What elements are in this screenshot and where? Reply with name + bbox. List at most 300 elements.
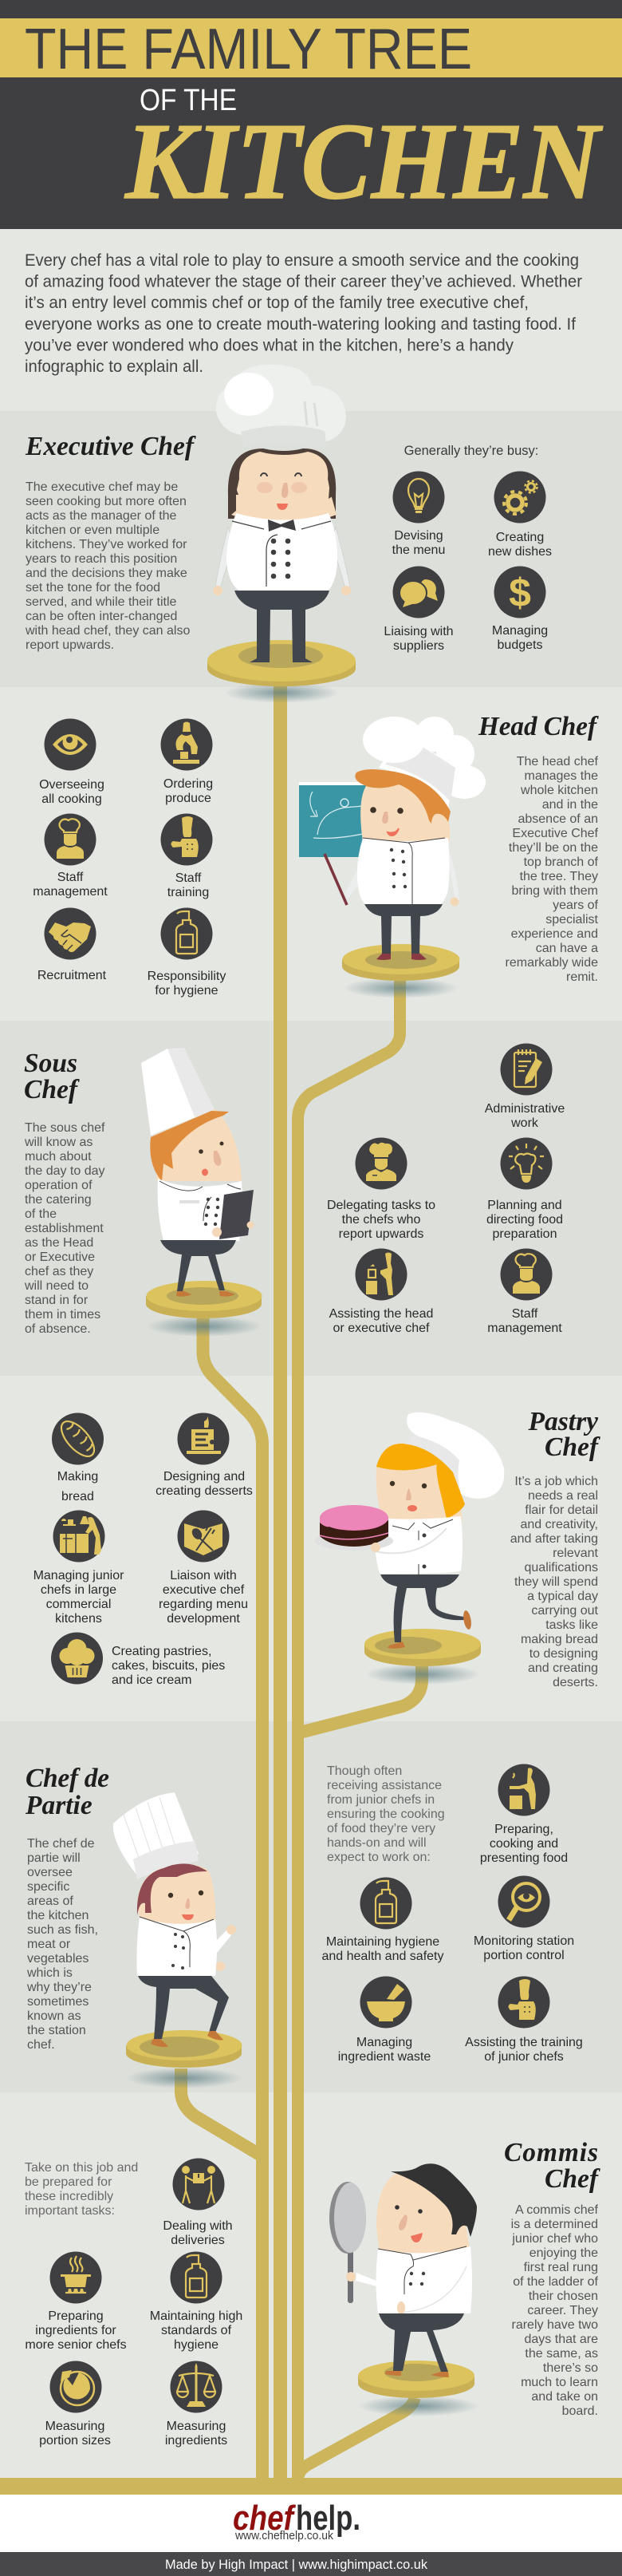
section: commis chef xyxy=(25,2138,600,2448)
pointer xyxy=(325,854,347,905)
body text: of the xyxy=(25,1207,57,1221)
intro text: ensuring the cooking xyxy=(327,1808,445,1821)
character: head chef xyxy=(299,717,486,960)
body text: such as fish, xyxy=(27,1923,98,1937)
body text: remit. xyxy=(566,970,598,984)
icon: preparing ingredients xyxy=(49,2252,102,2303)
panel: executive chef background xyxy=(0,411,622,687)
label: produce xyxy=(165,792,211,805)
label: management xyxy=(33,885,108,899)
label: development xyxy=(167,1612,240,1626)
label: bread xyxy=(61,1490,94,1503)
icon: recruitment xyxy=(45,908,96,959)
label: Designing and xyxy=(163,1470,245,1484)
label: Monitoring station xyxy=(474,1934,574,1948)
title: kitchen: KITCHEN xyxy=(124,101,604,222)
intro text: it’s an entry level commis chef or top of the family tree executive chef, xyxy=(25,294,529,312)
face and hair xyxy=(355,769,451,842)
shoes xyxy=(388,1610,473,1649)
body text: kitchen or even multiple xyxy=(26,523,159,537)
label: regarding menu xyxy=(159,1598,248,1611)
label: deliveries xyxy=(171,2234,225,2247)
branch: chef de partie xyxy=(181,2068,262,2156)
label: Overseeing xyxy=(39,778,104,792)
platform shadows xyxy=(127,682,480,2416)
hand xyxy=(450,897,459,907)
label: or executive chef xyxy=(333,1322,430,1335)
label: Assisting the training xyxy=(465,2036,583,2049)
body text: served, and while their title xyxy=(26,595,177,609)
footer: credit bar xyxy=(0,2552,622,2576)
intro text: be prepared for xyxy=(25,2175,112,2189)
trousers xyxy=(379,2313,464,2372)
label: Administrative xyxy=(485,1102,565,1116)
intro text: of amazing food whatever the stage of their career they’ve achieved. Whether xyxy=(25,273,582,291)
heading: Executive Chef xyxy=(25,432,196,461)
body text: enjoying the xyxy=(529,2246,598,2260)
body text: as the Head xyxy=(25,1236,93,1250)
body text: first real rung xyxy=(524,2261,598,2274)
label: ingredient waste xyxy=(338,2050,431,2064)
body text: partie will xyxy=(27,1851,81,1865)
arm xyxy=(356,2273,376,2286)
icon: managing junior chefs in large commercial kitchens xyxy=(53,1510,105,1563)
label: report upwards xyxy=(339,1227,423,1241)
label: portion control xyxy=(483,1949,565,1962)
label: the chefs who xyxy=(342,1213,420,1227)
label: Managing xyxy=(356,2036,412,2049)
label: Measuring xyxy=(45,2420,104,2433)
heading: Head Chef xyxy=(478,712,599,741)
panel: intro background xyxy=(0,229,622,411)
body text: why they’re xyxy=(26,1981,92,1994)
icon: monitoring station portion control xyxy=(498,1875,550,1928)
body text: much to learn xyxy=(521,2376,598,2389)
body text: Executive Chef xyxy=(512,827,599,840)
body text: junior chef who xyxy=(511,2232,598,2246)
body text: stand in for xyxy=(25,1294,89,1307)
body text: years to reach this position xyxy=(26,552,177,566)
body text: the kitchen xyxy=(27,1909,89,1922)
body text: a typical day xyxy=(527,1590,598,1603)
intro text: expect to work on: xyxy=(327,1851,431,1864)
body text: they’ll be on the xyxy=(509,841,598,855)
heading: Chef de xyxy=(26,1764,109,1793)
body text: of the ladder of xyxy=(513,2275,599,2289)
header panel xyxy=(0,0,622,229)
body text: needs a real xyxy=(528,1489,598,1503)
label: Liaison with xyxy=(170,1569,237,1582)
label: Delegating tasks to xyxy=(327,1199,435,1212)
character: pastry chef xyxy=(315,1412,504,1649)
hands xyxy=(215,1925,236,1971)
icon: liaison with executive chef regarding menu development xyxy=(177,1510,230,1563)
body text: It’s a job which xyxy=(514,1475,598,1488)
section: sous chef xyxy=(24,1044,565,1336)
icon: responsibility for hygiene xyxy=(161,908,212,959)
body text: and after taking xyxy=(510,1532,598,1546)
shoes xyxy=(385,2371,449,2377)
hat xyxy=(113,1792,199,1879)
title: of the: OF THE xyxy=(140,84,237,117)
jacket xyxy=(376,2246,472,2314)
jacket xyxy=(375,1516,463,1576)
credit text: Made by High Impact | www.highimpact.co.uk xyxy=(165,2557,427,2572)
label: work xyxy=(510,1116,539,1130)
right arm xyxy=(214,1930,231,1957)
label: Making xyxy=(57,1470,98,1484)
body text: days that are xyxy=(525,2333,598,2346)
body text: areas of xyxy=(27,1894,73,1908)
body text: kitchens. They’ve worked for xyxy=(26,538,187,551)
label: suppliers xyxy=(393,639,444,653)
hat xyxy=(363,717,486,810)
hat xyxy=(141,1048,215,1136)
body text: the station xyxy=(27,2024,86,2037)
platform xyxy=(358,2361,474,2398)
body text: meat or xyxy=(27,1938,71,1951)
label: portion sizes xyxy=(39,2434,111,2448)
intro text: these incredibly xyxy=(25,2190,113,2203)
branch: pastry chef xyxy=(300,1666,422,1732)
label: presenting food xyxy=(480,1851,568,1865)
body text: and creating xyxy=(528,1661,598,1675)
icon: staff management xyxy=(45,814,96,865)
heading: Commis xyxy=(504,2138,598,2167)
intro text: important tasks: xyxy=(25,2204,115,2218)
logo: url: www.chefhelp.co.uk xyxy=(234,2529,333,2542)
label: Recruitment xyxy=(37,969,107,982)
label: Managing junior xyxy=(33,1569,124,1582)
intro text: you’ve ever wondered who does what in the kitchen, here’s a handy xyxy=(25,337,514,354)
tablet xyxy=(219,1190,254,1239)
label: cooking and xyxy=(490,1837,558,1851)
body text: The chef de xyxy=(27,1837,95,1851)
body text: The executive chef may be xyxy=(26,480,178,494)
icon: preparing, cooking and presenting food xyxy=(498,1764,550,1816)
label: Devising xyxy=(394,529,443,543)
panel: head chef background xyxy=(0,687,622,1021)
section: chef de partie xyxy=(25,1764,583,2068)
body text: can have a xyxy=(536,942,598,955)
body text: remarkably wide xyxy=(506,956,598,970)
label: Measuring xyxy=(167,2420,226,2433)
section: pastry chef xyxy=(33,1407,600,1689)
body text: manages the xyxy=(524,769,598,783)
panel: chef de partie background xyxy=(0,1721,622,2092)
footer: logo panel xyxy=(0,2495,622,2552)
label: the menu xyxy=(392,543,445,557)
intro text: everyone works as one to create mouth-watering looking and tasting food. If xyxy=(25,315,576,334)
icon: dealing with deliveries xyxy=(172,2158,225,2211)
jacket xyxy=(357,838,450,904)
body text: making bread xyxy=(521,1633,598,1646)
body text: the tree. They xyxy=(520,870,598,883)
trousers xyxy=(380,1574,464,1642)
frying pan xyxy=(329,2182,366,2303)
label: commercial xyxy=(46,1598,111,1611)
label: Dealing with xyxy=(163,2219,233,2233)
body text: vegetables xyxy=(27,1952,89,1966)
body text: deserts. xyxy=(553,1676,598,1689)
icon: creating new dishes xyxy=(494,471,545,523)
branch: sous chef xyxy=(203,1318,262,2478)
section: executive chef xyxy=(25,365,552,686)
heading: Pastry xyxy=(528,1407,598,1436)
panel: pastry chef background xyxy=(0,1376,622,1721)
icon: creating pastries xyxy=(51,1633,103,1684)
face and hair xyxy=(150,1109,242,1181)
body text: carrying out xyxy=(531,1604,599,1618)
body text: qualifications xyxy=(525,1561,598,1574)
label: for hygiene xyxy=(155,984,218,998)
label: Preparing, xyxy=(494,1823,553,1836)
icon: ordering produce xyxy=(161,718,212,771)
body text: chef. xyxy=(27,2038,55,2052)
hat xyxy=(216,365,346,449)
icon: making bread xyxy=(52,1412,104,1465)
body text: the day to day xyxy=(25,1164,105,1178)
character: executive chef xyxy=(213,365,351,662)
icon: managing budgets xyxy=(494,567,545,618)
title: the family tree: THE FAMILY TREE xyxy=(25,18,472,81)
label: training xyxy=(167,886,209,899)
branch: commis chef xyxy=(298,2398,415,2478)
label: Preparing xyxy=(48,2309,104,2323)
shoes xyxy=(376,954,427,960)
subheading: Generally they’re busy: xyxy=(404,444,538,458)
body text: set the tone for the food xyxy=(26,581,160,595)
icon: managing ingredient waste xyxy=(360,1976,411,2029)
body text: experience and xyxy=(511,927,598,941)
label: Responsibility xyxy=(148,970,226,983)
intro text: Take on this job and xyxy=(25,2161,138,2175)
label: and health and safety xyxy=(321,1950,444,1963)
base band xyxy=(0,2478,622,2495)
intro text: receiving assistance xyxy=(327,1779,442,1792)
label: Maintaining hygiene xyxy=(326,1935,439,1949)
body text: bring with them xyxy=(512,884,598,898)
shoes xyxy=(176,1291,235,1297)
icon: liaising with suppliers xyxy=(392,567,445,618)
label: creating desserts xyxy=(156,1484,253,1498)
platform xyxy=(146,1281,262,1318)
label: and ice cream xyxy=(112,1673,191,1687)
body text: much about xyxy=(25,1150,92,1164)
body text: and the decisions they make xyxy=(26,567,187,580)
chalkboard xyxy=(299,782,367,857)
intro text: Every chef has a vital role to play to ensure a smooth service and the cooking xyxy=(25,251,579,270)
icon: managing budgets: $ xyxy=(509,571,531,615)
body text: and take on xyxy=(531,2390,598,2404)
label: new dishes xyxy=(488,545,552,559)
body text: which is xyxy=(26,1966,73,1980)
body text: with head chef, they can also xyxy=(25,624,190,638)
face and hair xyxy=(376,2163,477,2254)
intro text: hands-on and will xyxy=(327,1836,427,1850)
body text: their chosen xyxy=(529,2290,598,2303)
icon: maintaining high standards of hygiene xyxy=(171,2252,222,2303)
body text: can be often inter-changed xyxy=(26,610,177,623)
body text: there’s so xyxy=(543,2361,598,2375)
heading: Chef xyxy=(24,1075,80,1104)
icon: measuring ingredients xyxy=(171,2361,222,2413)
label: Maintaining high xyxy=(150,2309,242,2323)
icon: assisting the training of junior chefs xyxy=(498,1976,550,2029)
platform xyxy=(342,944,459,981)
label: budgets xyxy=(498,638,542,652)
body text: and in the xyxy=(542,798,598,812)
body text: whole kitchen xyxy=(520,784,598,797)
body text: absence of an xyxy=(518,812,598,826)
face and hair xyxy=(228,448,337,525)
body text: they will spend xyxy=(514,1575,598,1589)
body text: specialist xyxy=(545,913,599,926)
icon: delegating tasks xyxy=(356,1138,407,1189)
body text: to designing xyxy=(529,1647,598,1661)
icon: overseeing all cooking xyxy=(45,718,96,771)
hands xyxy=(212,1221,254,1237)
body text: operation of xyxy=(25,1179,93,1192)
body text: the same, as xyxy=(525,2347,598,2361)
body text: specific xyxy=(27,1880,69,1894)
trousers xyxy=(138,1976,229,2039)
body text: career. They xyxy=(527,2304,598,2317)
label: management xyxy=(487,1322,562,1335)
body text: oversee xyxy=(27,1866,73,1879)
trousers xyxy=(234,591,329,662)
icon: administrative work xyxy=(501,1044,552,1095)
character: sous chef xyxy=(141,1048,254,1297)
label: Creating xyxy=(496,531,544,544)
cake xyxy=(315,1505,393,1551)
label: preparation xyxy=(493,1227,557,1241)
body text: or Executive xyxy=(25,1250,95,1264)
label: Staff xyxy=(175,871,202,885)
heading: Sous xyxy=(24,1049,77,1078)
label: Managing xyxy=(492,624,548,638)
body text: will need to xyxy=(24,1279,89,1293)
label: ingredients for xyxy=(35,2324,116,2337)
body text: chef as they xyxy=(25,1265,93,1278)
hat xyxy=(405,1412,504,1499)
label: directing food xyxy=(486,1213,563,1227)
logo: chef: chef xyxy=(233,2499,297,2538)
body text: them in times xyxy=(25,1308,100,1322)
hand xyxy=(346,2272,356,2282)
intro text: infographic to explain all. xyxy=(25,358,203,376)
branch: head chef xyxy=(298,981,400,2478)
label: all cooking xyxy=(41,792,102,806)
shoes xyxy=(151,2031,223,2047)
intro text: of food they’re very xyxy=(327,1822,435,1835)
label: ingredients xyxy=(165,2434,227,2448)
body text: of absence. xyxy=(25,1322,91,1336)
character: chef de partie xyxy=(113,1792,236,2047)
body text: seen cooking but more often xyxy=(26,495,187,508)
body text: report upwards. xyxy=(26,638,114,652)
label: cakes, biscuits, pies xyxy=(112,1659,225,1673)
hand xyxy=(371,1543,380,1552)
label: chefs in large xyxy=(41,1583,116,1597)
body text: The sous chef xyxy=(25,1121,105,1135)
icon: devising the menu xyxy=(392,471,445,523)
icon: staff training xyxy=(161,814,212,865)
body text: board. xyxy=(562,2404,598,2418)
hands xyxy=(213,586,351,595)
body text: acts as the manager of the xyxy=(26,509,177,523)
panel: commis chef background xyxy=(0,2092,622,2478)
jacket xyxy=(226,513,337,591)
heading: Chef xyxy=(545,1432,600,1462)
arms xyxy=(215,527,350,588)
body text: tasks like xyxy=(545,1618,598,1632)
intro text: from junior chefs in xyxy=(327,1793,435,1807)
body text: top branch of xyxy=(524,855,599,869)
body text: is a determined xyxy=(511,2218,598,2231)
panel: sous chef background xyxy=(0,1021,622,1376)
icon: staff management xyxy=(501,1248,552,1301)
body text: and creativity, xyxy=(520,1518,598,1531)
label: hygiene xyxy=(174,2338,218,2352)
label: Staff xyxy=(512,1307,538,1321)
label: Creating pastries, xyxy=(112,1645,211,1658)
face and hair xyxy=(137,1863,215,1931)
body text: known as xyxy=(27,2009,81,2023)
body text: A commis chef xyxy=(515,2203,599,2217)
character: commis chef xyxy=(329,2163,477,2377)
body text: sometimes xyxy=(27,1995,89,2009)
platform xyxy=(207,640,356,686)
jacket xyxy=(158,1179,242,1241)
body text: The head chef xyxy=(517,755,599,768)
label: Planning and xyxy=(487,1199,562,1212)
family tree trunk and branches xyxy=(181,682,422,2478)
label: Assisting the head xyxy=(329,1307,433,1321)
body text: relevant xyxy=(553,1547,599,1560)
label: Staff xyxy=(57,871,84,884)
face and hair xyxy=(376,1444,465,1520)
body text: will know as xyxy=(24,1136,93,1149)
heading: Chef xyxy=(545,2164,600,2194)
body text: rarely have two xyxy=(512,2318,598,2332)
heading: Partie xyxy=(25,1791,93,1820)
arms xyxy=(344,846,459,900)
body text: the catering xyxy=(25,1193,92,1207)
icon: designing and creating desserts xyxy=(177,1412,230,1465)
body text: flair for detail xyxy=(525,1503,598,1517)
intro text: Though often xyxy=(327,1764,402,1778)
label: more senior chefs xyxy=(25,2338,127,2352)
label: standards of xyxy=(161,2324,232,2337)
platform xyxy=(126,2030,242,2068)
label: of junior chefs xyxy=(484,2050,564,2064)
label: kitchens xyxy=(55,1612,102,1626)
jacket xyxy=(136,1917,217,1976)
icon: planning and directing food preparation xyxy=(501,1138,552,1189)
trousers xyxy=(364,904,443,954)
platform xyxy=(364,1629,481,1666)
label: executive chef xyxy=(163,1583,245,1597)
body text: years of xyxy=(553,899,599,912)
label: Ordering xyxy=(163,777,213,791)
body text: establishment xyxy=(25,1222,104,1235)
section: head chef xyxy=(33,712,599,998)
icon: assisting the head or executive chef xyxy=(356,1248,407,1301)
logo: help: help. xyxy=(296,2499,360,2538)
icon: maintaining hygiene and health and safety xyxy=(360,1877,411,1930)
label: Liaising with xyxy=(384,625,454,638)
